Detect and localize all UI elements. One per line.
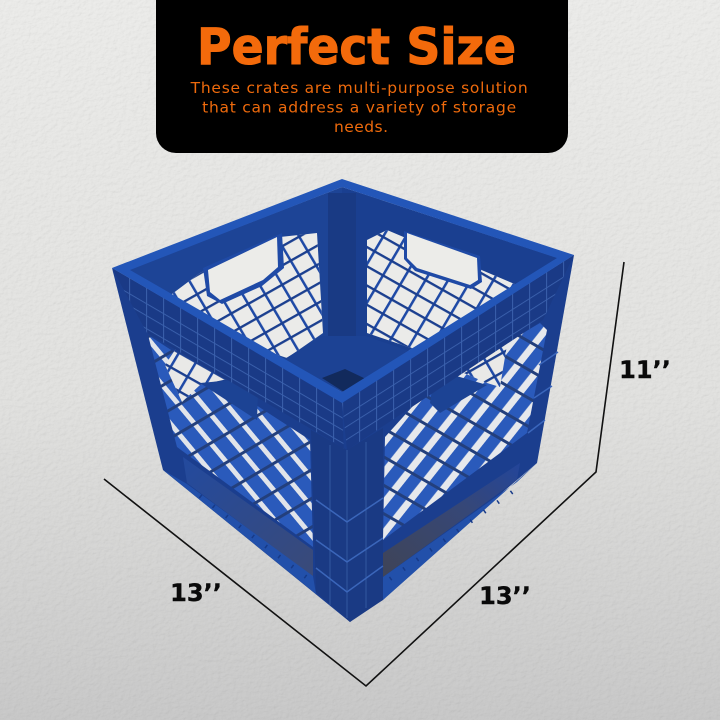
dimension lines: [104, 262, 624, 686]
back left handle: [203, 233, 284, 304]
inner left handle seen through opening: [200, 380, 258, 420]
crate back inner walls: [128, 187, 558, 392]
label: depth: 13’’: [170, 579, 222, 607]
right ribbed top band: [342, 255, 574, 450]
far wall visible through left opening: [165, 347, 237, 402]
back right wall lattice: [367, 230, 517, 350]
top rim: [112, 179, 574, 403]
left outer face: [112, 268, 350, 622]
label: width: 13’’: [479, 582, 531, 610]
right lower solid panel: [383, 463, 520, 577]
left bottom band: [163, 470, 316, 594]
left side opening: [148, 335, 313, 547]
left lower solid panel: [183, 457, 313, 577]
inner right handle seen through opening: [430, 375, 487, 413]
left ribbed top band: [112, 268, 347, 450]
back right handle: [404, 231, 482, 289]
far wall visible through right opening: [450, 327, 510, 387]
label: height: 11’’: [619, 356, 671, 384]
front corner post: [311, 428, 383, 622]
heading: Perfect Size: [197, 18, 516, 76]
title panel: [156, 0, 568, 153]
right outer face: [342, 255, 574, 622]
crate lower back walls and floor: [283, 336, 412, 392]
back left wall lattice: [168, 233, 323, 358]
crate: [112, 179, 574, 622]
right bottom band: [383, 463, 537, 600]
description text: These crates are multi-purpose solution: [190, 79, 528, 97]
description text: that can address a variety of storage: [202, 98, 516, 116]
description text: needs.: [334, 118, 388, 136]
right side rib lines: [528, 352, 558, 433]
right side opening: [383, 323, 547, 540]
